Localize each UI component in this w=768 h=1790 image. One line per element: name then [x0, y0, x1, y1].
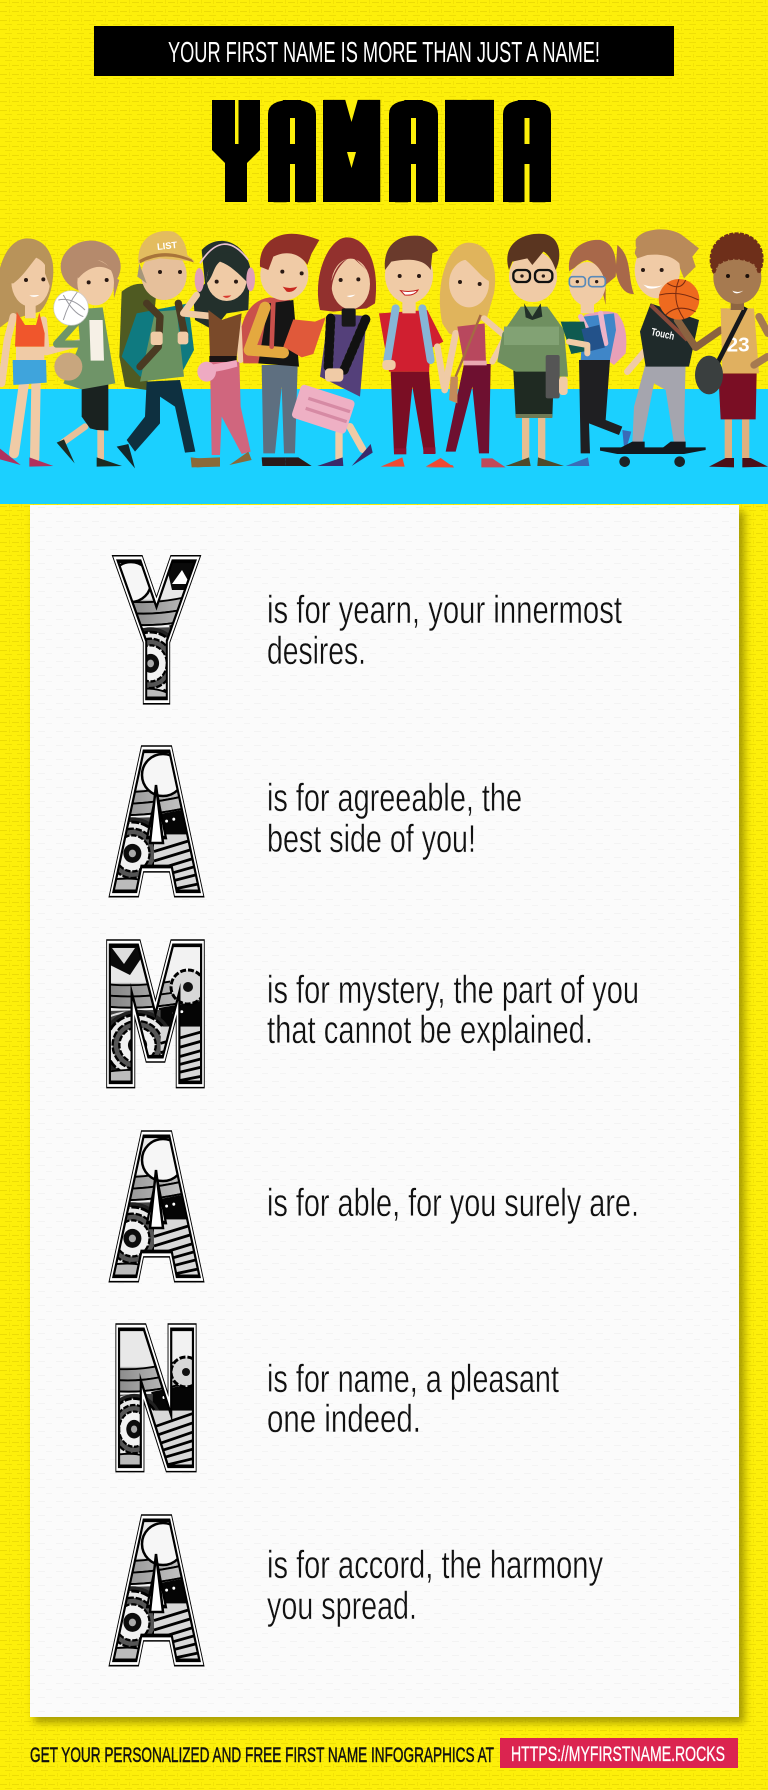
- title: [212, 91, 551, 216]
- text: Y meaning: [267, 589, 622, 673]
- person 3: backpacker with cap: LIST: [156, 240, 178, 252]
- letter Y: [112, 555, 202, 705]
- letter A second: A: [115, 1102, 198, 1320]
- person 11: skater with basketball: Touch: [650, 326, 675, 343]
- illustration: group of people right: [379, 229, 768, 467]
- text: A meaning: is for agreeable, the: [267, 777, 522, 820]
- letter A third: A: [115, 1486, 198, 1704]
- letter A third: A: [115, 1486, 198, 1704]
- text: Y meaning: desires.: [267, 630, 366, 673]
- letter A third: [108, 1514, 204, 1666]
- person 11: skater with basketball: [600, 229, 721, 467]
- letter A: A: [115, 717, 198, 935]
- panel shadow: [34, 511, 745, 1723]
- person 2: girl with volleyball: [54, 241, 122, 467]
- letter A: A: [115, 717, 198, 935]
- person 10: girl with tablet: [561, 240, 634, 466]
- title: M: [325, 92, 379, 216]
- letter A second: A: [115, 1102, 198, 1320]
- text: third A meaning: [267, 1544, 604, 1628]
- title: Y: [218, 91, 254, 216]
- text: Y meaning: is for yearn, your innermost: [267, 589, 622, 632]
- person 6: girl with pink case: [291, 237, 376, 466]
- letter Y: Y: [119, 526, 193, 740]
- text: M meaning: [267, 969, 639, 1052]
- title: N: [446, 92, 493, 216]
- title: A: [395, 91, 432, 216]
- text: second A meaning: is for able, for you surely are.: [267, 1182, 639, 1225]
- person 12: boy with bag: 23: [727, 334, 750, 357]
- title: A: [273, 91, 311, 216]
- title: A: [508, 91, 546, 216]
- person 7: boy in red shirt: [379, 236, 454, 467]
- letter M: M: [101, 911, 210, 1124]
- letter N: N: [110, 1295, 202, 1508]
- person 9: boy with glasses: [497, 234, 568, 466]
- illustration: group of people left: [0, 231, 376, 468]
- text: M meaning: is for mystery, the part of you: [267, 969, 639, 1012]
- letter A: [108, 745, 204, 898]
- text: N meaning: [267, 1358, 559, 1441]
- ground band: [0, 389, 768, 504]
- text: M meaning: that cannot be explained.: [267, 1009, 593, 1052]
- text: N meaning: is for name, a pleasant: [267, 1358, 559, 1401]
- person 3: backpacker with cap: [117, 231, 220, 468]
- text: A meaning: [267, 777, 522, 861]
- footer link badge: [500, 1738, 738, 1768]
- letter M: [106, 939, 205, 1088]
- letter Y: Y: [119, 526, 193, 740]
- letter N: N: [110, 1295, 202, 1508]
- footer text: GET YOUR PERSONALIZED AND FREE FIRST NAME INFOGRAPHICS AT: [30, 1743, 494, 1767]
- text: third A meaning: is for accord, the harmony: [267, 1544, 604, 1587]
- person 4: girl with headphones: [183, 241, 255, 467]
- header banner: [94, 26, 674, 76]
- letter N: N: [110, 1295, 202, 1508]
- person 1: girl in orange top: [0, 238, 80, 467]
- letter Y: Y: [119, 526, 193, 740]
- letter M: M: [101, 911, 210, 1124]
- letter A second: A: [115, 1102, 198, 1320]
- letter A second: [108, 1130, 204, 1282]
- text: third A meaning: you spread.: [267, 1585, 417, 1628]
- text: A meaning: best side of you!: [267, 818, 476, 861]
- panel: letters and meanings: [30, 505, 739, 1717]
- letter N: [115, 1323, 197, 1472]
- letter A: A: [115, 717, 198, 935]
- text: N meaning: one indeed.: [267, 1398, 421, 1441]
- letter A third: A: [115, 1486, 198, 1704]
- person 5: boy with book: [242, 234, 326, 466]
- person 8: blonde girl: [426, 243, 506, 467]
- letter M: M: [101, 911, 210, 1124]
- person 12: boy with bag: [695, 233, 768, 467]
